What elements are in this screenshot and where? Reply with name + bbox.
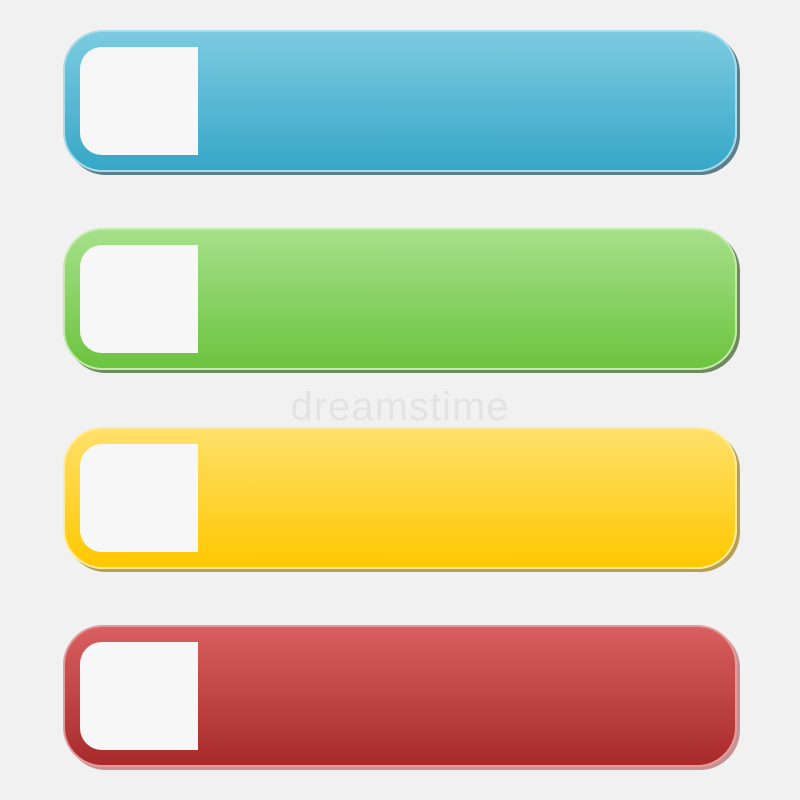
panel: blue bar	[63, 30, 737, 172]
panel: yellow bar	[63, 427, 737, 569]
watermark: dreamstime	[291, 385, 509, 429]
label box: yellow	[80, 444, 198, 552]
label box: blue	[80, 47, 198, 155]
label box: green	[80, 245, 198, 353]
panel: green bar	[63, 228, 737, 370]
panel: red bar	[63, 625, 737, 767]
label box: red	[80, 642, 198, 750]
